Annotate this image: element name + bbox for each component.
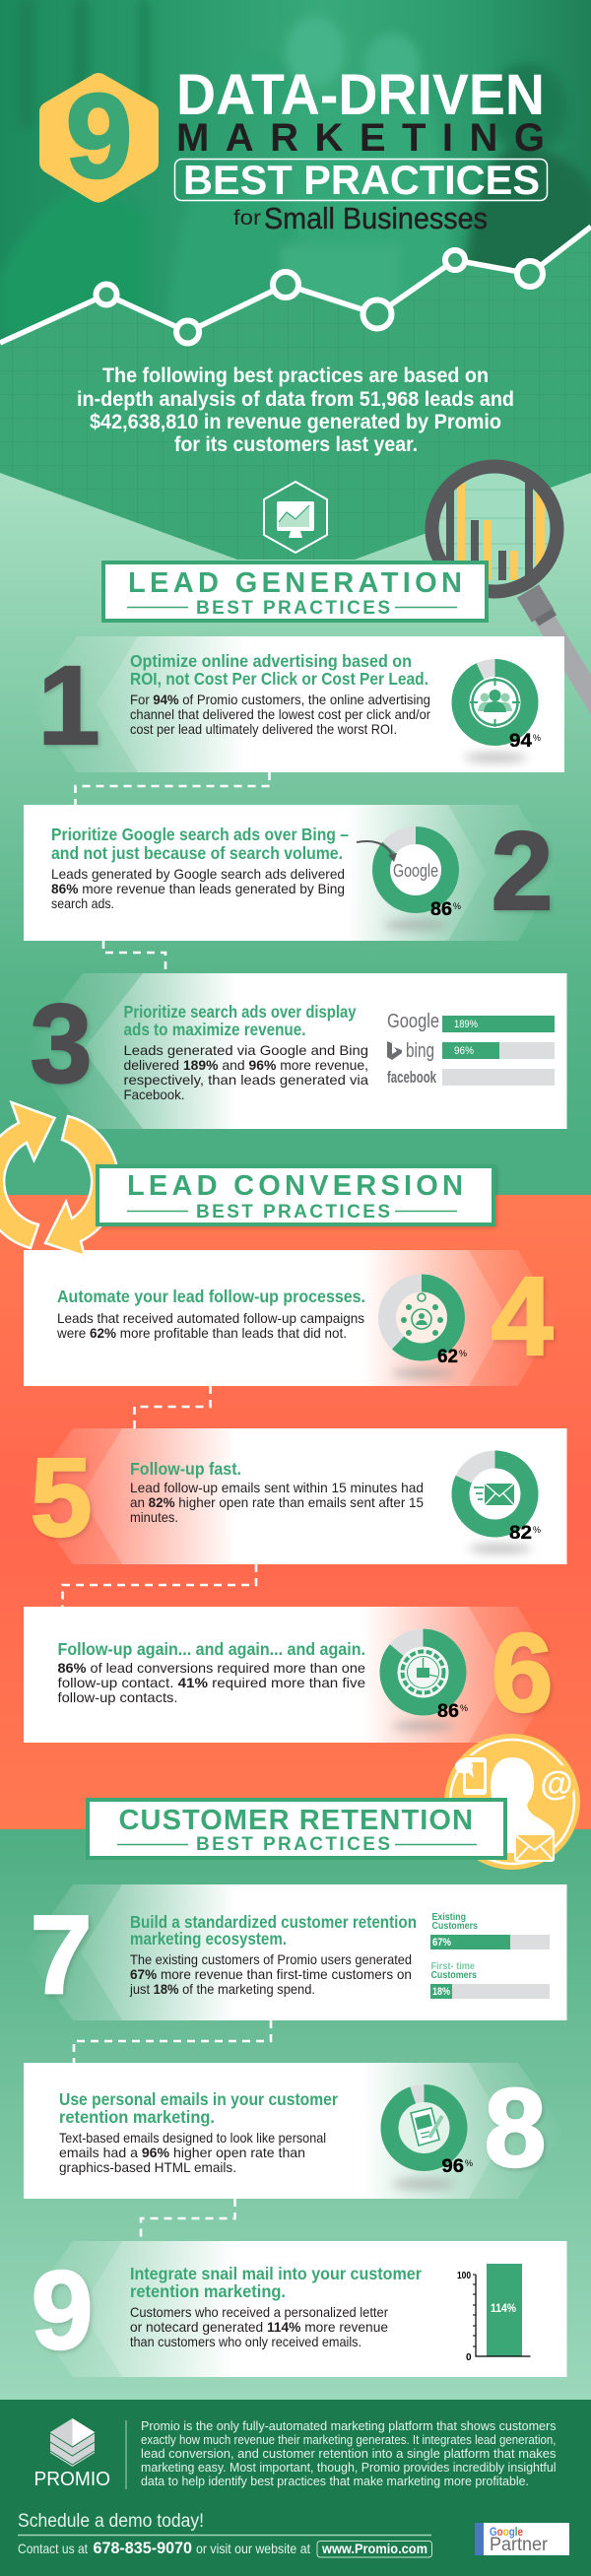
- panel: practice 8: [24, 2063, 563, 2199]
- donut chart 82%: 82: [509, 1522, 532, 1544]
- intro text: [77, 364, 514, 456]
- call to action: www.Promio.com: [321, 2541, 427, 2556]
- section heading: customer retention: [88, 1800, 505, 1858]
- body 4: [56, 1310, 364, 1341]
- body 2: [51, 866, 345, 911]
- panel: practice 5: [25, 1428, 567, 1564]
- phone with speech bubble: [455, 1755, 489, 1797]
- title: for: [233, 207, 261, 230]
- body 6: [57, 1660, 365, 1705]
- donut chart 94%: %: [533, 733, 541, 743]
- donut chart 62%: %: [459, 1349, 467, 1358]
- background: lead generation section: [0, 473, 591, 1195]
- donut chart 86% with clock: [388, 1637, 468, 1731]
- number 2: 2: [492, 809, 553, 933]
- donut chart 62%: 62: [437, 1346, 458, 1367]
- bar chart: existing vs first-time customers: Customers: [431, 1969, 477, 1981]
- body 2: 86% more revenue than leads generated by Bing: [51, 881, 345, 896]
- donut chart 86% with clock: 86: [437, 1700, 459, 1722]
- section heading: lead conversion: BEST PRACTICES: [196, 1202, 390, 1222]
- badge: Google Partner: [475, 2523, 569, 2555]
- icon: yellow hexagon with number 9: 9: [66, 69, 132, 203]
- title: DATA-DRIVEN: [176, 63, 545, 127]
- body 3: respectively, than leads generated via: [124, 1072, 368, 1088]
- about text: [141, 2418, 557, 2488]
- call to action: Schedule a demo today!: [18, 2511, 204, 2532]
- heading 7: Build a standardized customer retention: [130, 1912, 417, 1932]
- heading 8: [59, 2089, 338, 2127]
- number 8: 8: [485, 2066, 546, 2190]
- donut chart 86%: 86: [430, 898, 452, 920]
- body 6: follow-up contacts.: [57, 1689, 177, 1705]
- intro text: in-depth analysis of data from 51,968 leads and: [77, 388, 514, 411]
- title: [175, 63, 548, 235]
- bar chart: 114%: 0: [466, 2352, 472, 2363]
- person silhouette: [491, 1757, 555, 1853]
- icon: customer contact circle: [444, 1734, 580, 1870]
- donut chart 86% with clock: %: [460, 1703, 468, 1713]
- donut chart 96% with document: %: [465, 2158, 473, 2168]
- call to action: or visit our website at: [196, 2541, 310, 2556]
- title: BEST PRACTICES: [183, 157, 540, 203]
- bar chart: 114%: [457, 2264, 530, 2363]
- bar chart: google, bing, facebook: facebook: [387, 1068, 436, 1087]
- body 1: cost per lead ultimately delivered the worst ROI.: [130, 721, 397, 737]
- body 7: just 18% of the marketing spend.: [129, 1981, 315, 1997]
- section heading: lead generation: [103, 562, 487, 621]
- heading 1: ROI, not Cost Per Click or Cost Per Lead.: [130, 669, 428, 689]
- heading 5: Follow-up fast.: [130, 1459, 241, 1479]
- donut chart 94%: [461, 668, 541, 762]
- panel: practice 4: [24, 1250, 558, 1386]
- connector 7 to 8: [74, 2020, 271, 2063]
- body 1: channel that delivered the lowest cost per click and/or: [130, 706, 430, 722]
- intro text: for its customers last year.: [174, 433, 418, 456]
- panel: practice 1: [30, 636, 564, 772]
- panel: practice 6: [24, 1607, 558, 1743]
- logo: Promio: PROMIO: [33, 2469, 110, 2490]
- heading 7: [130, 1912, 417, 1949]
- panel: practice 2: [24, 805, 558, 941]
- bar chart: google, bing, facebook: [387, 1011, 555, 1087]
- badge: Google Partner: Partner: [490, 2535, 549, 2555]
- icon: magnifying glass over bars: [424, 463, 591, 714]
- body 8: [59, 2130, 326, 2175]
- heading 9: retention marketing.: [130, 2281, 286, 2301]
- number 3: 3: [31, 981, 92, 1105]
- donut chart 82%: %: [533, 1525, 541, 1535]
- body 9: or notecard generated 114% more revenue: [130, 2319, 388, 2335]
- number 4: 4: [492, 1254, 554, 1378]
- about text: data to help identify best practices that make marketing more profitable.: [141, 2474, 529, 2488]
- call to action: 678-835-9070: [93, 2539, 192, 2557]
- body 2: search ads.: [51, 895, 114, 911]
- title: Small Businesses: [264, 201, 488, 235]
- body 7: 67% more revenue than first-time customers on: [130, 1966, 412, 1982]
- section heading: lead conversion: [98, 1166, 493, 1224]
- section heading: lead conversion: LEAD CONVERSION: [127, 1170, 463, 1202]
- body 8: emails had a 96% higher open rate than: [59, 2145, 305, 2160]
- line chart with markers: [0, 227, 591, 343]
- background: lead conversion section: [0, 1195, 591, 1829]
- panel: practice 9: [25, 2241, 567, 2377]
- heading 8: retention marketing.: [59, 2107, 215, 2127]
- heading 1: [130, 651, 428, 689]
- heading 8: Use personal emails in your customer: [59, 2089, 338, 2109]
- connector 8 to 9: [141, 2199, 234, 2241]
- bar chart: google, bing, facebook: bing: [406, 1040, 434, 1062]
- envelope: [515, 1834, 554, 1861]
- body 5: [130, 1480, 424, 1525]
- section heading: lead generation: LEAD GENERATION: [128, 567, 462, 599]
- bar chart: existing vs first-time customers: Existing: [431, 1911, 466, 1923]
- body 8: Text-based emails designed to look like personal: [59, 2130, 326, 2146]
- number 6: 6: [492, 1611, 553, 1735]
- panel: practice 3: [25, 973, 567, 1129]
- section heading: customer retention: CUSTOMER RETENTION: [118, 1805, 473, 1836]
- bar chart: existing vs first-time customers: First- time: [431, 1960, 475, 1972]
- section heading: customer retention: BEST PRACTICES: [196, 1834, 390, 1855]
- body 6: 86% of lead conversions required more than one: [57, 1660, 365, 1676]
- heading 3: Prioritize search ads over display: [124, 1002, 357, 1022]
- body 5: Lead follow-up emails sent within 15 minutes had: [130, 1480, 424, 1495]
- section heading: lead generation: BEST PRACTICES: [196, 598, 390, 619]
- donut chart 96% with document: 96: [441, 2155, 464, 2177]
- donut chart 96% with document: [390, 2093, 473, 2189]
- body 7: [129, 1951, 412, 1997]
- body 5: minutes.: [130, 1509, 178, 1525]
- connector 5 to 6: [63, 1564, 256, 1607]
- body 1: [130, 692, 430, 737]
- body 6: follow-up contact. 41% required more than five: [57, 1675, 365, 1690]
- bar chart: google, bing, facebook: 96%: [454, 1045, 474, 1057]
- icon: yellow recycling arrows: [0, 1102, 118, 1256]
- heading 3: [124, 1002, 357, 1039]
- body 3: [124, 1042, 368, 1102]
- heading 2: Prioritize Google search ads over Bing –: [51, 825, 349, 844]
- bar chart: 114%: 114%: [491, 2301, 516, 2315]
- body 9: [130, 2304, 388, 2349]
- donut chart 86%: Google: [393, 861, 438, 881]
- body 3: Leads generated via Google and Bing: [124, 1042, 368, 1058]
- heading 4: Automate your lead follow-up processes.: [57, 1287, 365, 1306]
- donut chart 94%: 94: [509, 730, 532, 752]
- heading 1: Optimize online advertising based on: [130, 651, 412, 671]
- call to action: [18, 2511, 431, 2557]
- body 5: an 82% higher open rate than emails sent after 15: [130, 1494, 424, 1510]
- badge: Google Partner: Google: [490, 2525, 523, 2539]
- about text: marketing easy. Most important, though, Promio provides incredibly insightful: [141, 2460, 557, 2475]
- background: customer retention section: [0, 1829, 591, 2400]
- bar chart: existing vs first-time customers: [430, 1911, 550, 1999]
- connector 1 to 2: [75, 772, 270, 805]
- icon: monitor in hexagon: [264, 482, 327, 553]
- donut chart 82%: [461, 1460, 541, 1553]
- body 8: graphics-based HTML emails.: [59, 2159, 236, 2175]
- panel: practice 7: [25, 1884, 567, 2020]
- bar chart: existing vs first-time customers: 18%: [432, 1986, 450, 1998]
- about text: lead conversion, and customer retention into a single platform that makes: [141, 2446, 557, 2461]
- body 1: For 94% of Promio customers, the online advertising: [130, 692, 430, 707]
- bar chart: google, bing, facebook: 189%: [454, 1019, 478, 1030]
- title: MARKETING: [176, 116, 545, 160]
- intro text: The following best practices are based on: [102, 364, 489, 387]
- bar chart: 114%: 100: [457, 2271, 471, 2281]
- bar chart: google, bing, facebook: Google: [387, 1011, 439, 1032]
- heading 7: marketing ecosystem.: [130, 1929, 287, 1949]
- body 2: Leads generated by Google search ads delivered: [51, 866, 345, 882]
- number 5: 5: [31, 1435, 92, 1559]
- heading 2: [51, 825, 349, 863]
- background: chart area with grid: [0, 227, 591, 571]
- about text: Promio is the only fully-automated marketing platform that shows customers: [141, 2418, 557, 2433]
- heading 2: and not just because of search volume.: [51, 843, 343, 863]
- body 9: than customers who only received emails.: [130, 2334, 361, 2349]
- number 7: 7: [31, 1892, 92, 2016]
- body 4: were 62% more profitable than leads that did not.: [56, 1325, 347, 1341]
- heading 9: Integrate snail mail into your customer: [130, 2264, 422, 2283]
- donut chart 86%: %: [453, 901, 461, 911]
- heading 3: ads to maximize revenue.: [124, 1020, 305, 1039]
- heading 6: Follow-up again... and again... and again.: [57, 1639, 365, 1659]
- bar chart: existing vs first-time customers: Customers: [431, 1920, 478, 1932]
- body 4: Leads that received automated follow-up campaigns: [57, 1310, 364, 1326]
- connector 2 to 3: [103, 941, 165, 973]
- icon: yellow hexagon with number 9: [39, 69, 159, 203]
- body 3: Facebook.: [124, 1087, 185, 1102]
- donut chart 86%: [357, 835, 461, 930]
- background: top photo: [0, 0, 591, 355]
- call to action: Contact us at: [18, 2541, 88, 2556]
- body 9: Customers who received a personalized letter: [130, 2304, 388, 2320]
- at sign: @: [540, 1765, 573, 1803]
- body 7: The existing customers of Promio users generated: [130, 1951, 412, 1967]
- heading 9: [130, 2264, 422, 2301]
- number 1: 1: [38, 643, 99, 767]
- footer: [0, 2400, 591, 2576]
- logo: Promio: [33, 2418, 110, 2490]
- bar chart: existing vs first-time customers: 67%: [432, 1937, 451, 1949]
- connector 4 to 5: [134, 1386, 211, 1428]
- donut chart 62%: [387, 1283, 467, 1378]
- number 9: 9: [32, 2248, 93, 2372]
- intro text: $42,638,810 in revenue generated by Promio: [90, 411, 501, 433]
- body 3: delivered 189% and 96% more revenue,: [124, 1057, 368, 1073]
